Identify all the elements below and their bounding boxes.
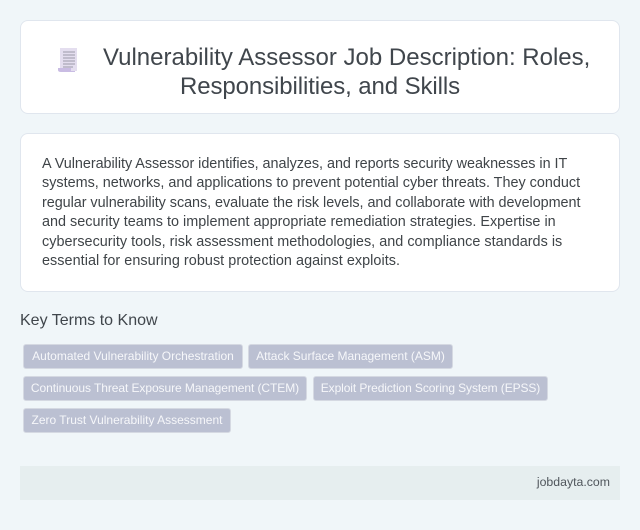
tag: Zero Trust Vulnerability Assessment [32,413,222,427]
footer bar [20,466,620,500]
title [103,44,590,100]
tag [23,408,231,433]
description text: A Vulnerability Assessor identifies, analyzes, and reports security weaknesses in IT [42,156,567,172]
description text: cybersecurity tools, risk assessment methodologies, and compliance standards is [42,234,562,250]
tag: Automated Vulnerability Orchestration [32,349,234,363]
tag [23,344,243,369]
tag [248,344,453,369]
tag [313,376,548,401]
tag: Continuous Threat Exposure Management (CTEM) [31,381,299,395]
tag: Attack Surface Management (ASM) [256,349,445,363]
title: Responsibilities, and Skills [180,73,460,100]
tags: key terms [23,344,548,433]
description text: essential for ensuring robust protection against exploits. [42,253,400,269]
icon: document scroll [58,48,77,72]
tag: Exploit Prediction Scoring System (EPSS) [321,381,540,395]
description text: and security teams to implement appropriate remediation strategies. Expertise in [42,214,556,230]
panel: description card [20,133,620,292]
heading: key terms: Key Terms to Know [20,312,158,329]
footer text: jobdayta.com [537,475,610,489]
panel: header card [20,20,620,114]
description text: regular vulnerability scans, evaluate the risk levels, and collaborate with development [42,195,580,211]
tag [23,376,307,401]
description text [42,156,580,269]
title: Vulnerability Assessor Job Description: Roles, [103,44,590,71]
description text: systems, networks, and applications to prevent potential cyber threats. They conduct [42,175,580,191]
